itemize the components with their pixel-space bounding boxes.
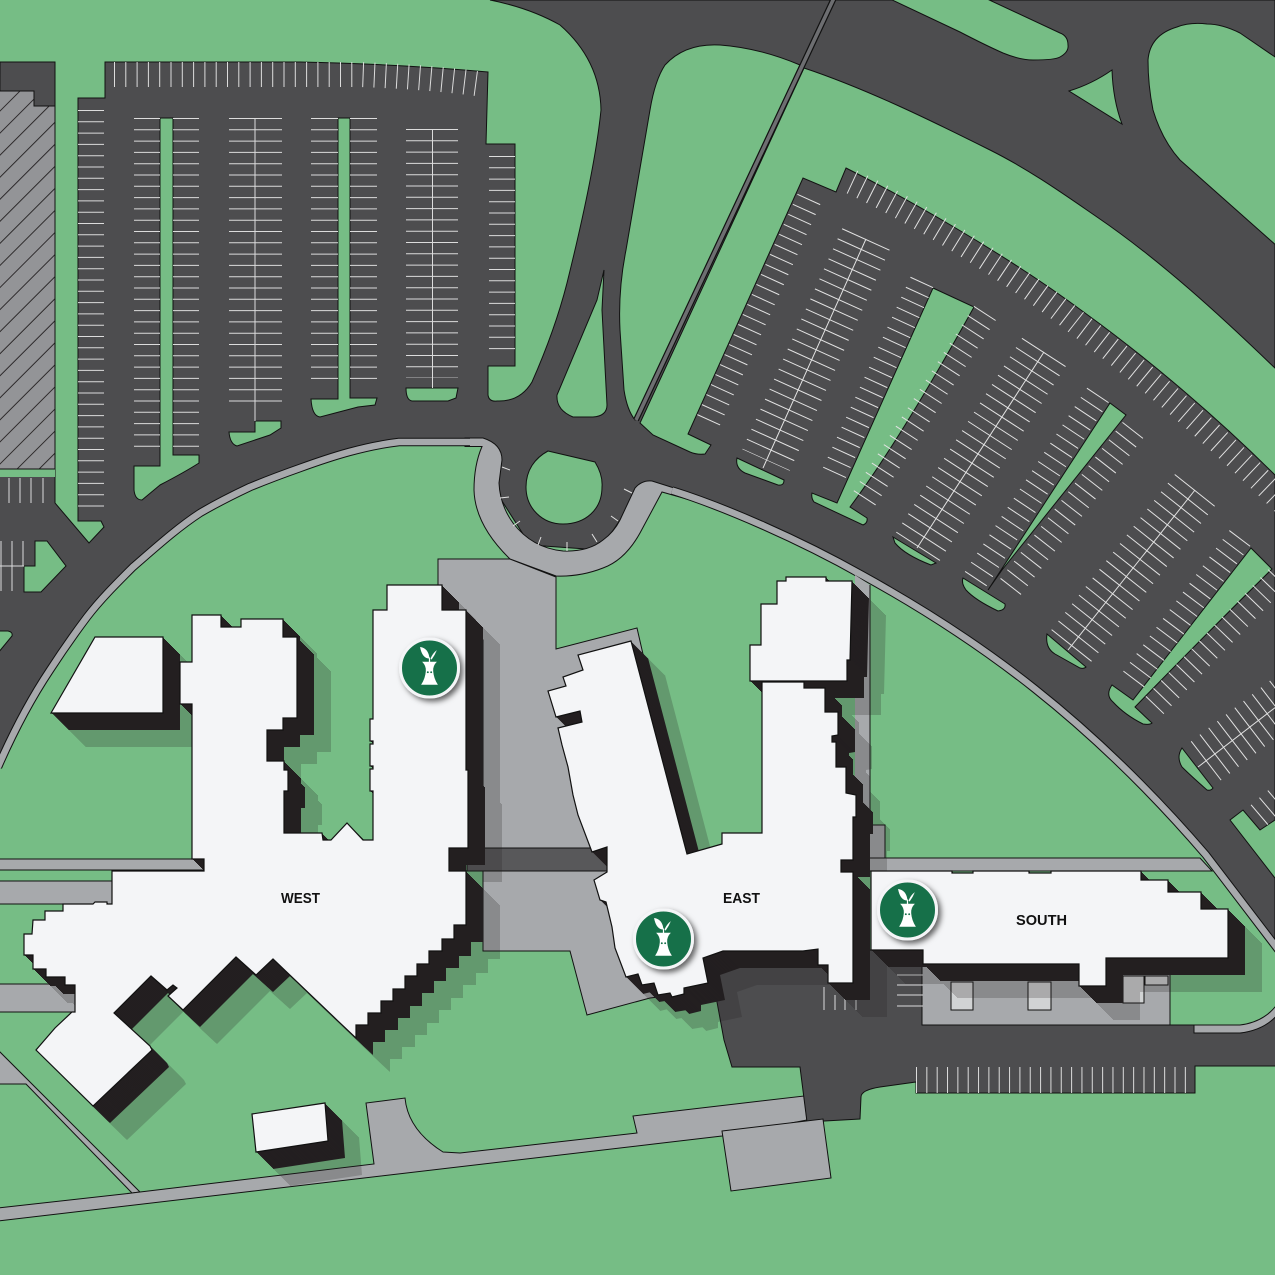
walkways west side [0,859,204,1193]
service rectangle pad [722,1119,831,1191]
label: EAST: EAST [723,890,760,907]
roundabout parking ticks [500,467,632,551]
parking stripes: curved lot [705,182,1275,816]
label: SOUTH: SOUTH [1016,912,1067,929]
gray service yard east [852,573,885,858]
south lot parking stripes [916,1067,1195,1093]
parking stripes: small southwest lot [0,478,43,591]
gap between surface lots [0,469,55,477]
hatched structure [0,91,55,469]
icon: apple core marker east [634,910,692,968]
south walkway strip [860,858,1212,871]
icon: apple core marker south [878,881,936,939]
cast shadows [42,595,1262,1186]
parking ticks beside east wing [824,975,923,1010]
icon: apple core marker west [400,639,458,697]
building extrusion sides [25,578,1245,1169]
patio posts [951,976,1168,1010]
roundabout walkway [465,438,690,576]
curved lot islands [737,288,1275,882]
diagonal service path [636,0,834,420]
south lot surface [712,950,1275,1122]
parking centre lines: west lot [255,118,432,421]
west lot islands [134,118,458,500]
curved walkways along main road [0,442,1275,952]
plaza between wings [438,559,720,1015]
covered bridge between wings [467,848,607,871]
main road and west parking surface [0,0,1275,948]
south service walkway [0,1096,807,1221]
label: WEST: WEST [281,890,320,907]
south curved walkway [1194,1003,1275,1033]
parking stripes: west lot [91,74,502,510]
parking centre lines: curved lot [763,239,1275,767]
building roofs [24,577,1228,1152]
lawn islands upper road [0,0,1275,653]
patio south of building [922,960,1170,1025]
